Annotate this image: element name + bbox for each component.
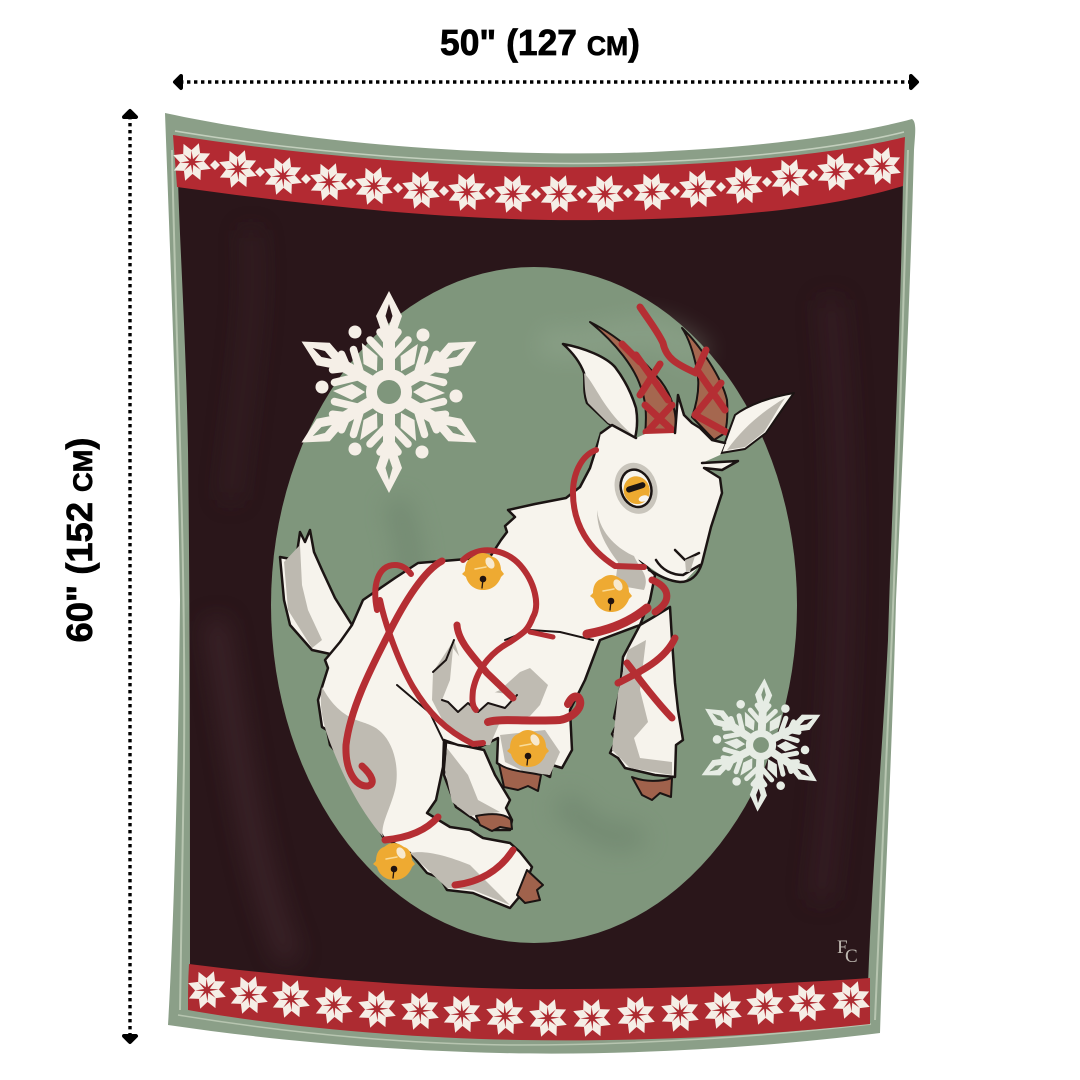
hooves	[499, 764, 543, 903]
bell: hind leg	[373, 843, 415, 880]
mouth and nose	[656, 550, 700, 575]
foreleg ribbons	[618, 638, 675, 683]
bell: belly	[507, 730, 549, 767]
belly ribbon	[488, 697, 580, 722]
bell: neck	[590, 575, 632, 612]
body shading	[321, 640, 560, 905]
goat body	[318, 433, 655, 908]
white tuft	[442, 648, 517, 712]
fur lines	[397, 630, 593, 740]
blanket dark field	[178, 180, 903, 998]
oval shading	[395, 333, 700, 838]
blanket	[165, 113, 915, 1054]
horn left	[590, 322, 676, 434]
signature mark	[837, 937, 858, 967]
eye	[608, 457, 664, 520]
large snowflake	[284, 291, 494, 493]
left ear	[563, 344, 637, 438]
goat head	[588, 395, 738, 590]
small snowflake	[688, 675, 834, 815]
green oval	[271, 267, 797, 943]
goat illustration	[280, 307, 794, 908]
right ear	[721, 393, 794, 453]
far hind leg	[444, 742, 512, 831]
near front leg	[610, 607, 683, 800]
width dimension label: 50" (127 CM)	[440, 22, 640, 63]
horn right	[640, 307, 727, 440]
cheek shading	[597, 510, 646, 590]
red ribbons	[346, 450, 675, 885]
tail	[280, 530, 352, 655]
top red band	[173, 135, 905, 220]
hoof	[632, 777, 672, 800]
ankle ribbons	[385, 817, 438, 840]
bottom snowflake pattern	[187, 970, 871, 1038]
hoof	[476, 814, 512, 831]
harness ribbons	[375, 565, 411, 610]
back ribbon	[463, 550, 536, 710]
bottom red band	[188, 964, 870, 1040]
signature mark: F	[837, 937, 848, 958]
collar ribbon	[573, 450, 644, 567]
arrow: height dimension	[124, 111, 136, 1042]
blanket border	[165, 113, 915, 1054]
bell: shoulder	[462, 553, 504, 590]
fabric folds	[215, 230, 842, 960]
arrow: width dimension	[175, 76, 917, 88]
loose red ribbon	[640, 307, 696, 373]
top snowflake pattern	[172, 142, 902, 214]
height dimension label: 60" (152 CM)	[59, 438, 100, 642]
signature mark: C	[845, 946, 858, 967]
